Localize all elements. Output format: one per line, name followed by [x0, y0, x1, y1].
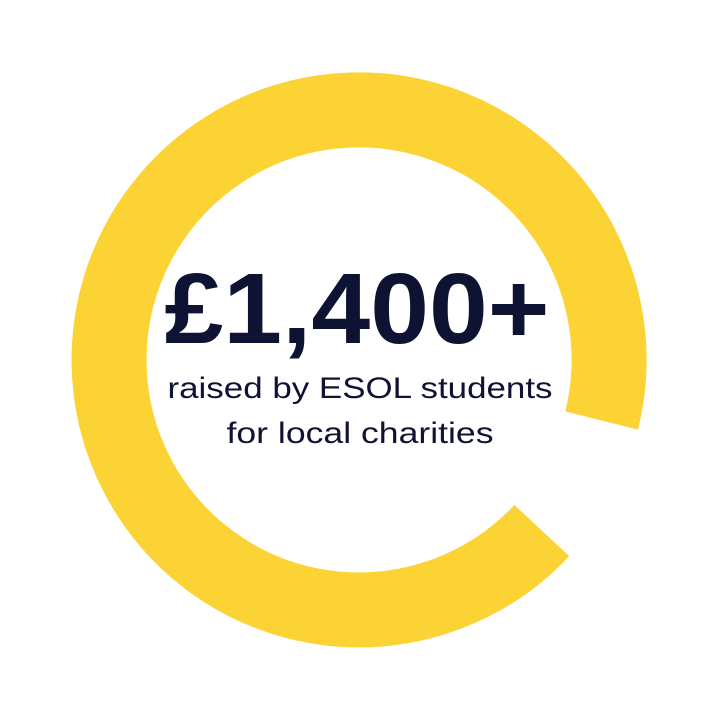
- yellow ring arc: [109, 110, 609, 610]
- headline figure: £1,400+: [164, 253, 550, 365]
- description text: for local charities: [226, 417, 494, 450]
- description text: [168, 372, 552, 450]
- description text: raised by ESOL students: [168, 372, 552, 405]
